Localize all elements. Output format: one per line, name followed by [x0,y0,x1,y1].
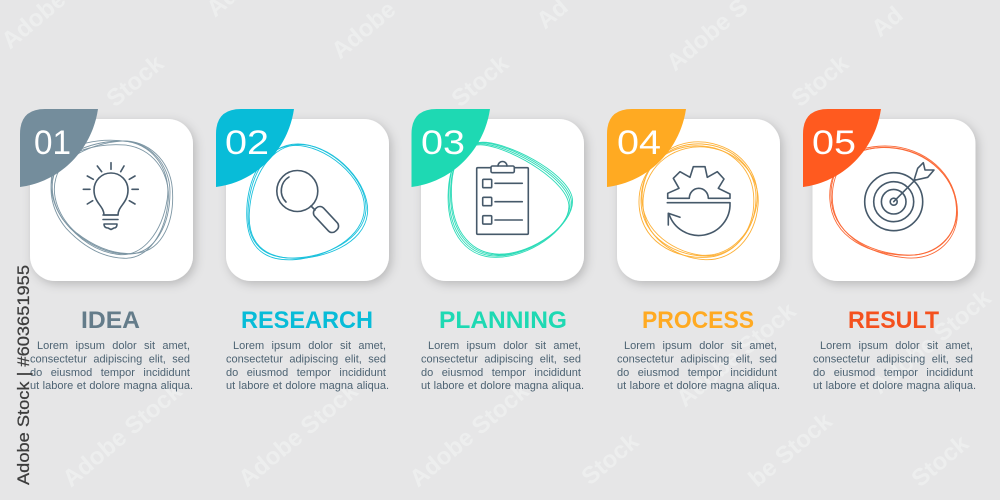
card [30,119,193,281]
heading: PROCESS [642,307,754,334]
text block [617,340,780,392]
heading: IDEA [81,307,140,334]
watermark pattern: be Stock [744,407,838,493]
text block: do eiusmod tempor incididunt [226,367,386,379]
watermark pattern: Adobe Stock [234,377,364,493]
text block: ut labore et dolore magna aliqua. [813,380,976,392]
text block [226,340,389,392]
icon: clipboard checklist [477,162,528,234]
number tab [412,109,490,187]
watermark pattern: Stock [577,427,644,491]
panel: result [803,109,976,392]
text block: do eiusmod tempor incididunt [30,367,190,379]
icon: light bulb [83,163,138,230]
vertical stock credit: Adobe Stock | #603651955 [15,265,33,485]
scribble circle [41,131,178,261]
text block [813,340,976,392]
number tab [607,109,686,187]
watermark pattern: Adobe Stock [672,297,802,413]
text block: Lorem ipsum dolor sit amet, [624,340,777,352]
text block: Lorem ipsum dolor sit amet, [820,340,973,352]
number tab [20,109,98,187]
text block: do eiusmod tempor incididunt [617,367,777,379]
number tab [216,109,294,187]
text block: consectetur adipiscing elit, sed [813,354,973,366]
watermark pattern: Stock [907,429,974,493]
watermark pattern: Stock [102,49,169,113]
card [421,119,584,281]
text block: consectetur adipiscing elit, sed [226,354,386,366]
number: 04 [617,124,661,162]
heading: RESULT [848,307,939,334]
panel: process [607,109,780,392]
number: 03 [421,124,465,162]
watermark pattern: Adobe Stock [405,377,535,493]
scribble circle [243,142,371,262]
watermark pattern: Ad [867,1,908,43]
card [617,119,780,281]
heading: RESEARCH [241,307,373,334]
text block: ut labore et dolore magna aliqua. [30,380,193,392]
number: 01 [34,124,71,162]
icon: target and arrow [865,163,934,231]
text block: ut labore et dolore magna aliqua. [617,380,780,392]
scribble circle [827,144,961,260]
watermark pattern: Adobe Stock [58,377,188,493]
number tab [803,109,881,187]
text block: Lorem ipsum dolor sit amet, [37,340,190,352]
heading: PLANNING [439,307,567,334]
text block: ut labore et dolore magna aliqua. [226,380,389,392]
watermark pattern: Adobe Stock [867,284,997,400]
number: 02 [225,124,269,162]
text block: do eiusmod tempor incididunt [813,367,973,379]
number: 05 [812,124,856,162]
text block: consectetur adipiscing elit, sed [421,354,581,366]
scribble circle [447,141,573,259]
text block [421,340,584,392]
watermark pattern: Stock [787,49,854,113]
text block: do eiusmod tempor incididunt [421,367,581,379]
panel: idea [20,109,193,392]
card [812,119,976,281]
text block: Lorem ipsum dolor sit amet, [428,340,581,352]
scribble circle [633,133,766,264]
text block [30,340,193,392]
watermark pattern: Stock [447,49,514,113]
text block: consectetur adipiscing elit, sed [30,354,190,366]
icon: magnifying glass [277,170,341,235]
icon: gear and cycle arrow [667,167,730,235]
card [226,119,389,281]
panel: planning [412,109,584,392]
text block: ut labore et dolore magna aliqua. [421,380,584,392]
text block: Lorem ipsum dolor sit amet, [233,340,386,352]
panel: research [216,109,389,392]
text block: consectetur adipiscing elit, sed [617,354,777,366]
